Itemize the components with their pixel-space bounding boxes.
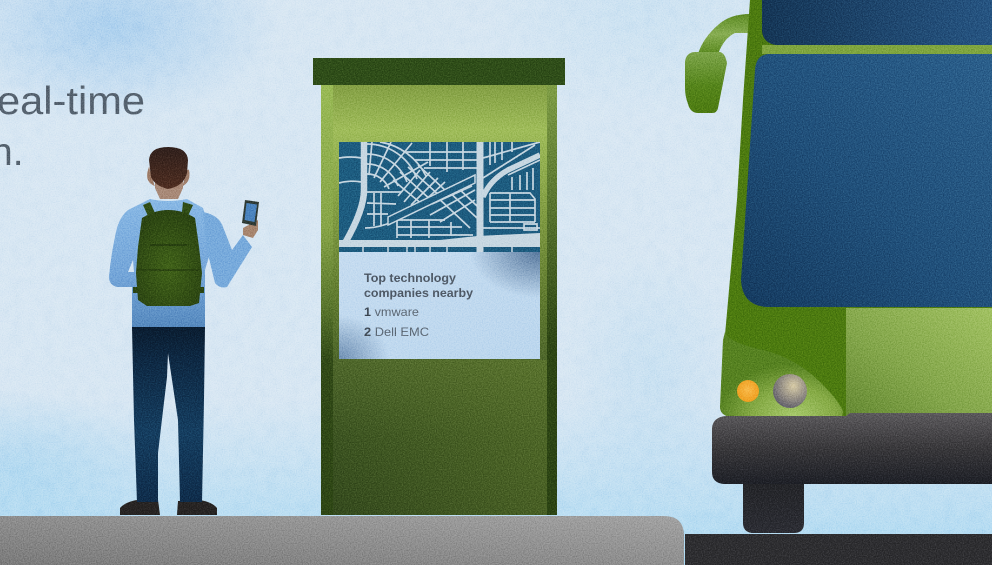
headline text fragment: eal-time bbox=[0, 80, 145, 123]
road bbox=[685, 534, 992, 565]
concentric arcs bbox=[367, 142, 426, 189]
south grid bbox=[397, 220, 473, 238]
wheel bbox=[743, 484, 804, 533]
right arm bbox=[203, 212, 252, 288]
kiosk roof cap bbox=[313, 58, 565, 85]
kiosk info panel: companies nearby bbox=[364, 286, 473, 300]
side mirror bbox=[685, 14, 750, 113]
kiosk info panel bbox=[339, 252, 540, 359]
north grid bbox=[405, 142, 477, 172]
lower road gaps bbox=[363, 247, 512, 252]
lower diamond grid bbox=[430, 185, 477, 228]
main roads bbox=[345, 142, 540, 252]
shoes bbox=[120, 500, 217, 515]
lower green panel bbox=[846, 308, 992, 416]
windshield bbox=[741, 54, 992, 307]
horizontal road bbox=[339, 233, 540, 247]
backpack bbox=[133, 202, 204, 306]
shirt torso and left arm bbox=[109, 199, 214, 327]
bus front bbox=[685, 0, 992, 533]
east block bbox=[483, 193, 540, 230]
hair bbox=[149, 147, 188, 189]
window divider bbox=[762, 45, 992, 54]
headline text fragment bbox=[0, 80, 145, 174]
neck bbox=[155, 180, 183, 199]
trousers bbox=[132, 327, 205, 502]
pavement curb bbox=[0, 516, 684, 565]
bus body bbox=[725, 0, 992, 416]
bumper bbox=[712, 413, 992, 484]
central band bbox=[388, 175, 475, 225]
person with backpack bbox=[109, 147, 259, 515]
panel heading: Top technology bbox=[364, 271, 456, 285]
headlight housing bbox=[720, 332, 843, 417]
kiosk map bbox=[339, 142, 540, 252]
phone bbox=[242, 200, 259, 226]
shirt gap bbox=[128, 260, 134, 272]
west streets bbox=[339, 157, 362, 183]
north-east grid bbox=[483, 142, 540, 165]
kiosk body bbox=[321, 85, 557, 515]
hand bbox=[243, 220, 258, 238]
information kiosk bbox=[313, 58, 565, 515]
radial spokes bbox=[369, 142, 428, 187]
amber indicator bbox=[737, 380, 759, 402]
ears bbox=[148, 170, 188, 184]
upper window bbox=[762, 0, 992, 45]
south-west grid bbox=[365, 192, 401, 228]
headlight bbox=[773, 374, 807, 408]
kiosk info panel: 2 Dell EMC bbox=[364, 325, 429, 339]
upper diamond grid bbox=[393, 165, 446, 206]
company list: 1 vmware bbox=[364, 305, 419, 319]
